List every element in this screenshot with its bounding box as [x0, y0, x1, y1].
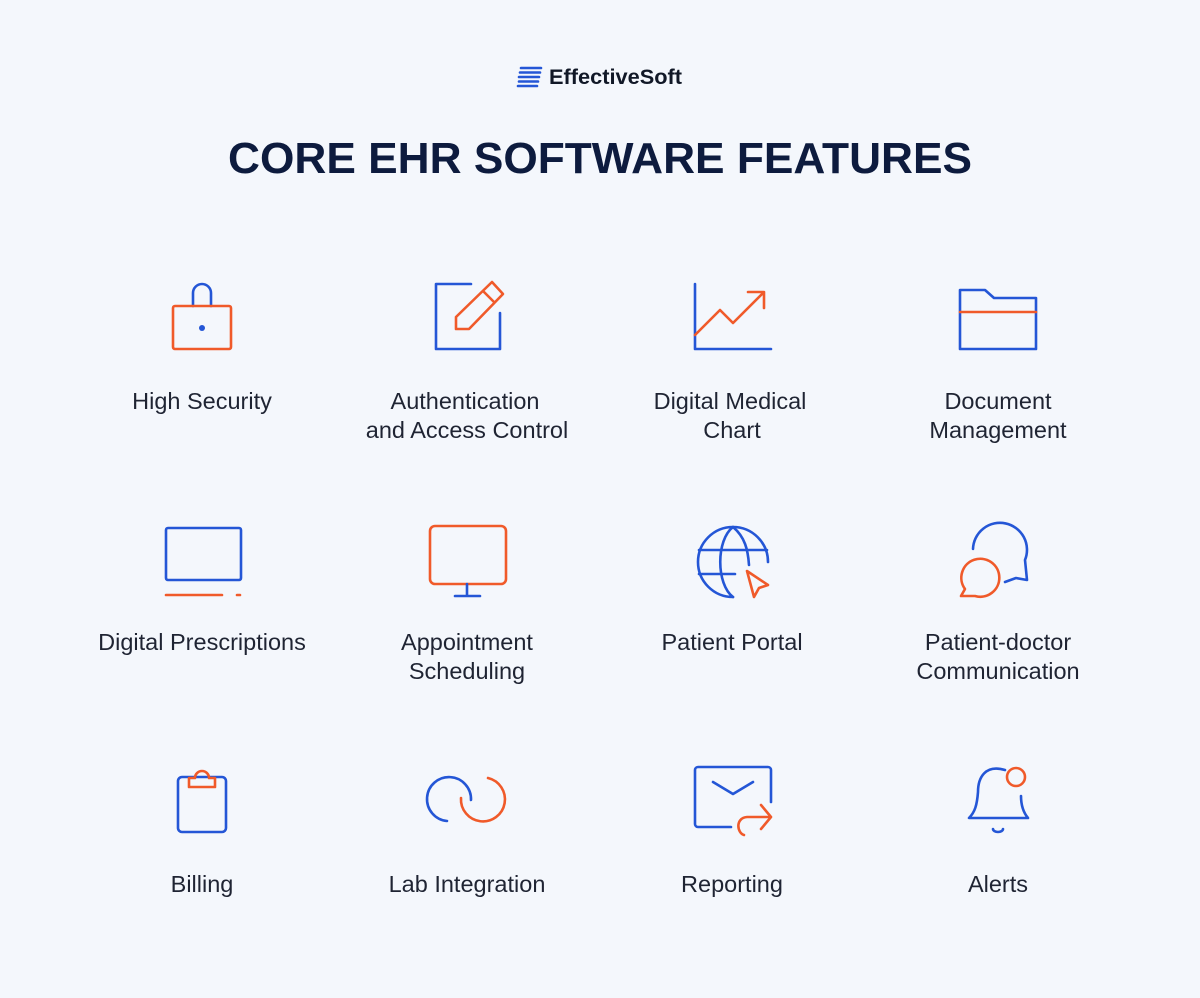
label: Reporting: Reporting [681, 871, 783, 897]
icon: monitor [430, 526, 506, 596]
label: Patient-doctor Communication: Patient-doctor [925, 629, 1071, 655]
label: Alerts: Alerts [968, 871, 1028, 897]
icon: bell [969, 768, 1028, 832]
label: High Security: High Security [132, 388, 272, 414]
icon: folder [960, 290, 1036, 349]
icon: lock [173, 284, 231, 349]
label: Document Management: Management [929, 417, 1067, 443]
icon: logo stripes [518, 68, 541, 86]
logo text: EffectiveSoft [549, 66, 682, 89]
icon: globe with cursor [698, 527, 768, 597]
title: CORE EHR SOFTWARE FEATURES [228, 134, 972, 183]
label: Digital Prescriptions: Digital Prescriptions [98, 629, 306, 655]
label: Digital Medical Chart: Digital Medical [654, 388, 806, 414]
icon: mail forward [695, 767, 771, 835]
label: Lab Integration: Lab Integration [389, 871, 545, 897]
label: Patient-doctor Communication: Communication [916, 658, 1080, 684]
icon: chart [695, 284, 771, 349]
icon: link [427, 777, 505, 821]
icon: chat bubbles [961, 523, 1027, 597]
icon: laptop [166, 528, 241, 595]
icon: clipboard [178, 771, 226, 832]
label: Appointment Scheduling: Scheduling [409, 658, 525, 684]
icon: edit [436, 282, 503, 349]
logo [518, 66, 682, 89]
label: Authentication and Access Control: Authentication [391, 388, 539, 414]
label: Appointment Scheduling: Appointment [401, 629, 533, 655]
label: Digital Medical Chart: Chart [703, 417, 761, 443]
label: Authentication and Access Control: and Access Control [366, 417, 568, 443]
label: Document Management: Document [944, 388, 1052, 414]
label: Billing: Billing [171, 871, 233, 897]
label: Patient Portal: Patient Portal [661, 629, 803, 655]
